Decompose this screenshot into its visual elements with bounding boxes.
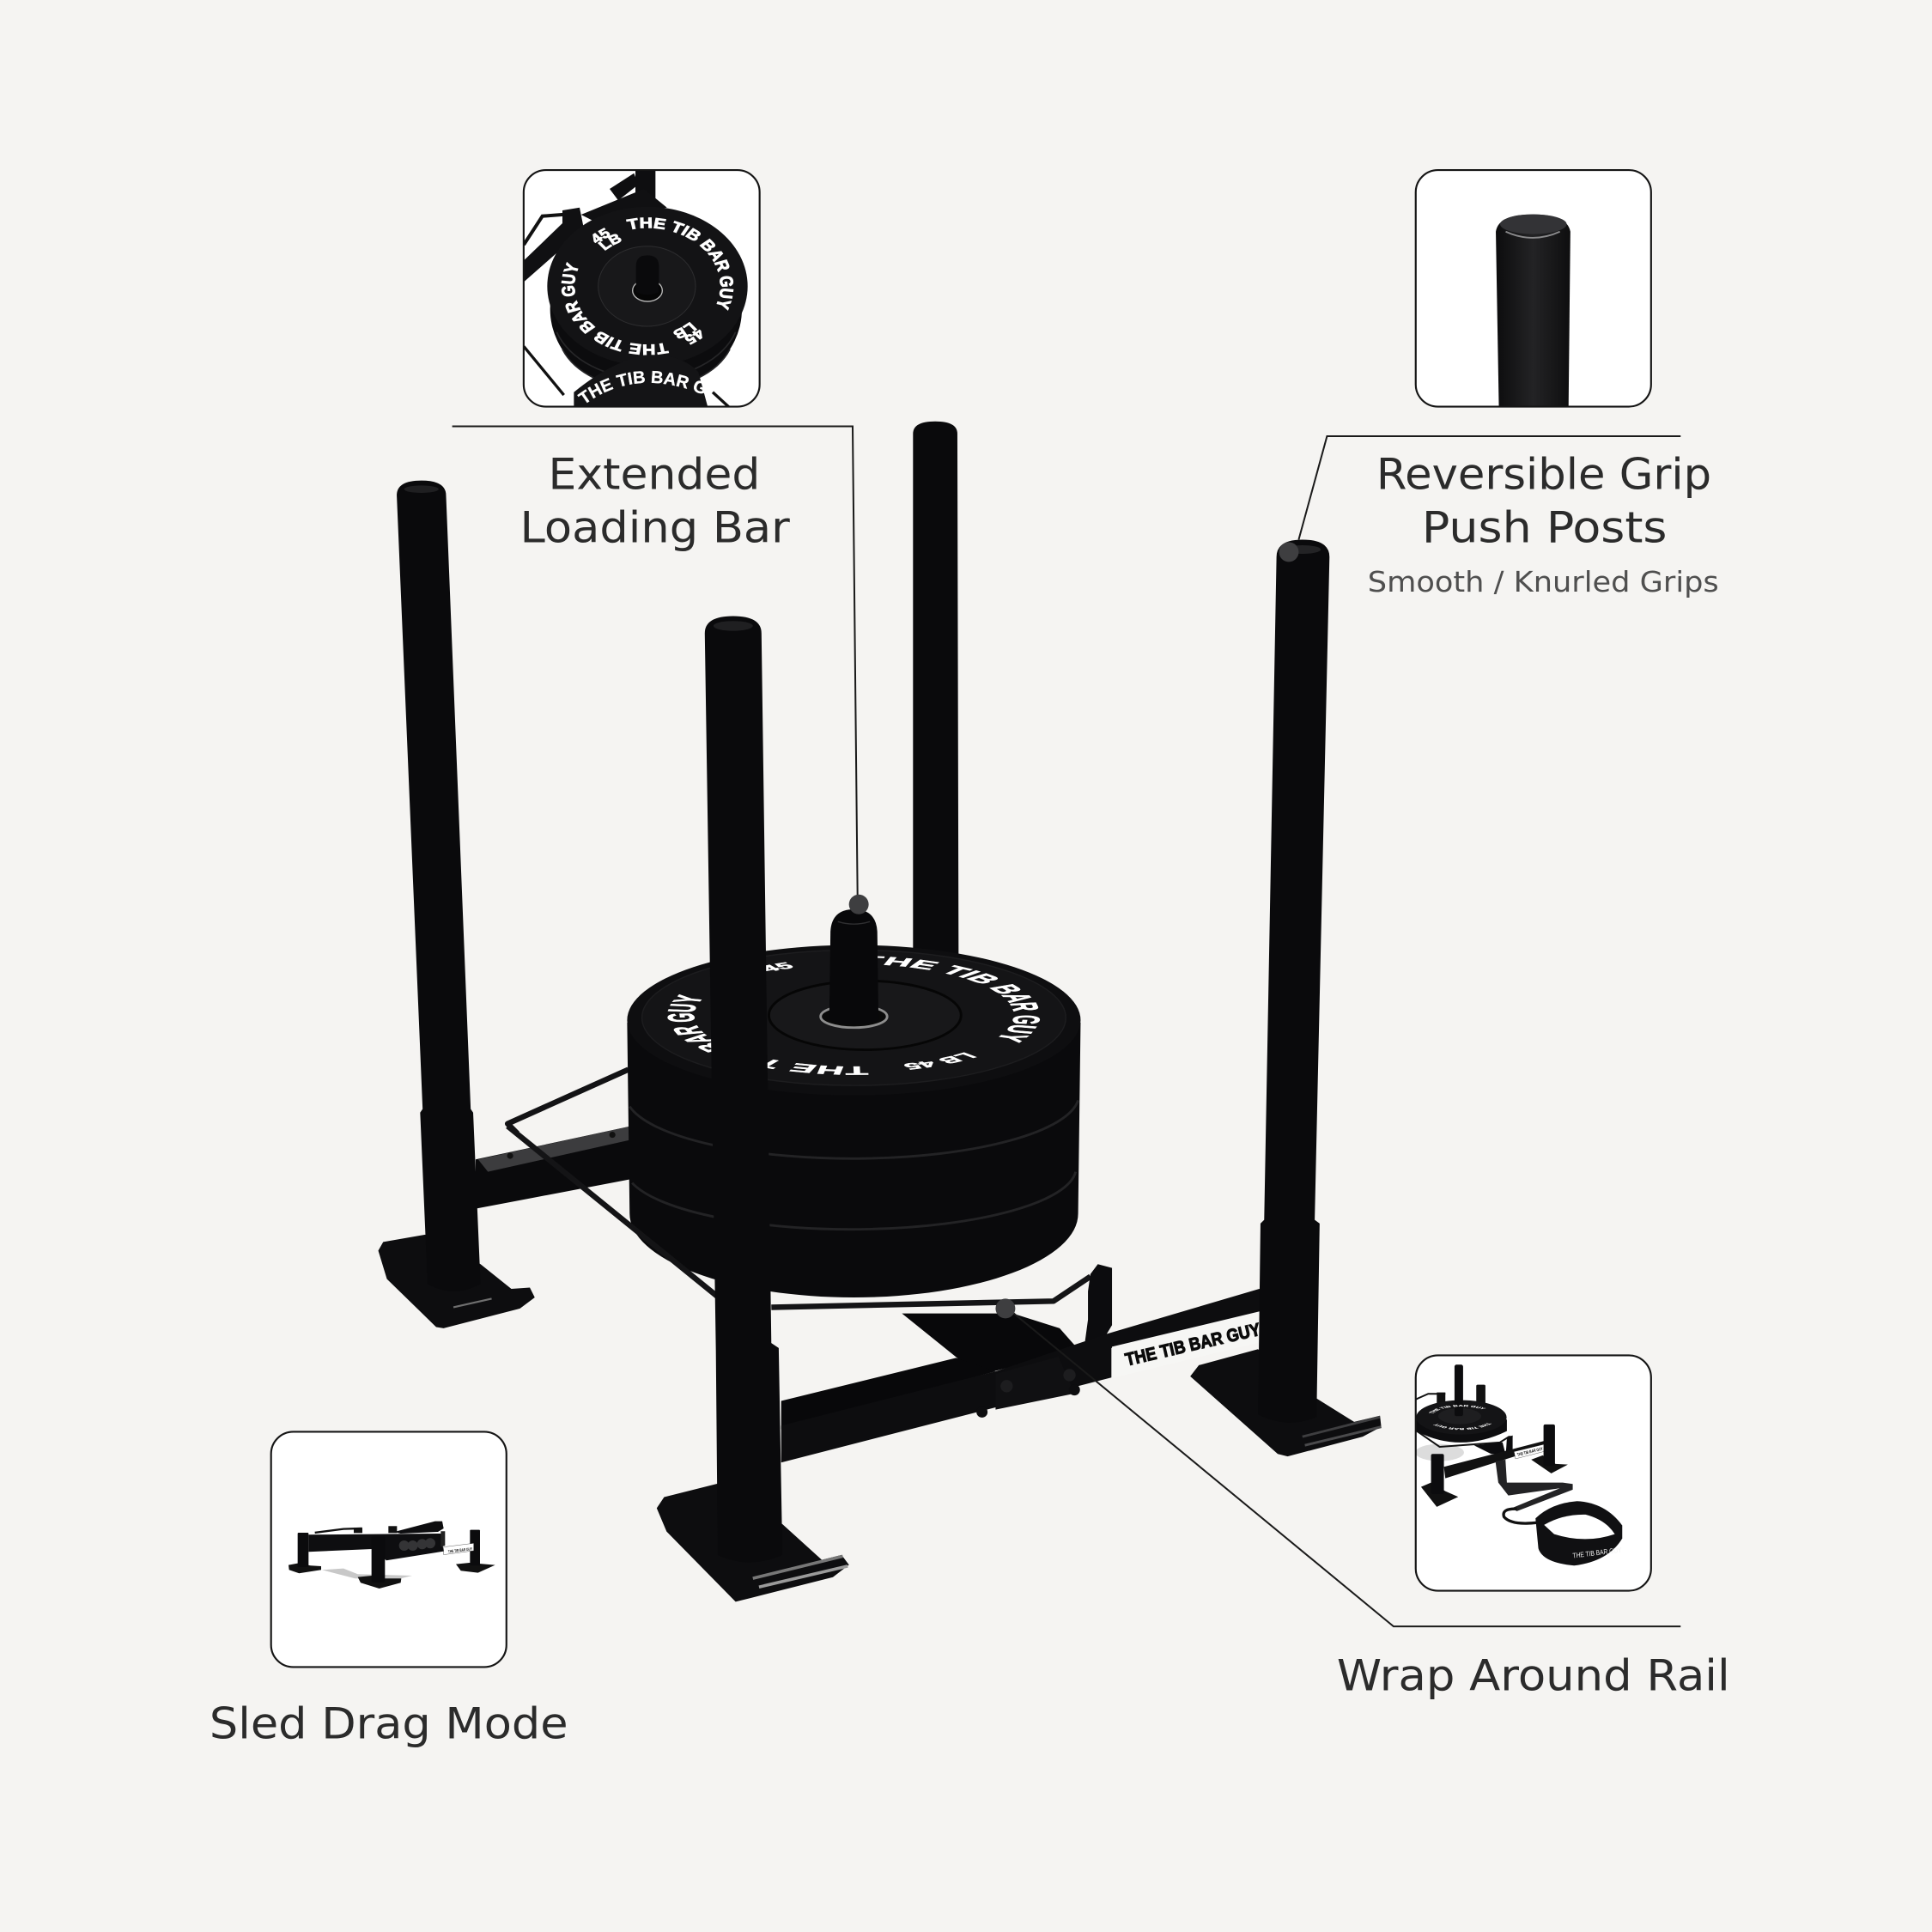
plate lettering: THE TIB BAR GUY	[667, 994, 869, 1075]
thumbnail: sled drag mode	[271, 1431, 507, 1667]
front left foot	[657, 1484, 849, 1601]
plate lettering	[667, 957, 1041, 1075]
thumbnail: loading bar close-up: THE TIB BAR GUY	[577, 371, 704, 404]
front right push post	[1258, 540, 1329, 1423]
back right push post	[913, 422, 958, 974]
thumbnail: loading bar close-up: 45	[685, 330, 702, 345]
callout line: reversible grip push posts	[1279, 436, 1680, 562]
sled product photo illustration	[343, 386, 1416, 1614]
thumbnail: knurled push post close-up	[1416, 170, 1651, 409]
extended loading bar	[829, 909, 878, 1024]
label: reversible grip push posts: Push Posts	[1422, 501, 1667, 552]
thumbnail: sled with harness: THE TIB BAR GUY	[1429, 1405, 1485, 1413]
thumbnail: loading bar close-up: LB	[598, 234, 622, 251]
plate lettering: LB 45	[766, 962, 793, 971]
brand plate: THE TIB BAR GUY	[1123, 1320, 1262, 1370]
thumbnail: loading bar close-up: THE TIB BAR GUY	[562, 261, 670, 355]
front crossbar	[781, 1289, 1274, 1462]
callout line: wrap around rail	[995, 1298, 1680, 1626]
thumbnail: sled with harness: THE TIB BAR GUY	[1572, 1546, 1622, 1560]
wrap around rail	[507, 1127, 1091, 1307]
label: reversible grip push posts: Smooth / Knurled Grips	[1368, 565, 1719, 598]
brand plate	[1112, 1308, 1274, 1378]
label: wrap around rail: Wrap Around Rail	[1337, 1650, 1730, 1701]
thumbnail: loading bar close-up: LB	[673, 321, 697, 338]
label: extended loading bar: Loading Bar	[520, 501, 790, 552]
plate lettering: LB 45	[904, 1053, 977, 1070]
weight plate stack	[627, 945, 1080, 1297]
back crossbar	[476, 1127, 631, 1209]
callout line: extended loading bar	[453, 426, 869, 914]
label: sled drag mode: Sled Drag Mode	[210, 1698, 568, 1749]
rail handle plate	[1084, 1264, 1112, 1346]
front left push post	[705, 616, 782, 1563]
label: extended loading bar	[520, 449, 790, 552]
thumbnail: loading bar close-up: 45	[592, 228, 610, 244]
thumbnail: sled with harness: THE TIB BAR GUY	[1516, 1447, 1544, 1458]
thumbnail: sled with harness: THE TIB BAR GUY	[1432, 1423, 1492, 1431]
thumbnail: loading bar close-up: THE TIB BAR GUY	[626, 217, 733, 311]
plate lettering: THE TIB BAR GUY	[878, 957, 1041, 1043]
thumbnail: sled with harness	[1415, 1354, 1652, 1592]
label: reversible grip push posts	[1368, 449, 1719, 598]
back left push post	[397, 481, 481, 1291]
thumbnail: sled drag mode: THE TIB BAR GUY	[448, 1546, 473, 1554]
wrap around rail back section	[507, 1070, 629, 1133]
front right foot	[1190, 1349, 1382, 1456]
back left foot	[379, 1235, 535, 1328]
thumbnail: loading bar close-up	[522, 169, 761, 408]
central bracket	[902, 1314, 1078, 1380]
label: extended loading bar: Extended	[549, 449, 760, 500]
label: reversible grip push posts: Reversible Grip	[1376, 449, 1711, 500]
